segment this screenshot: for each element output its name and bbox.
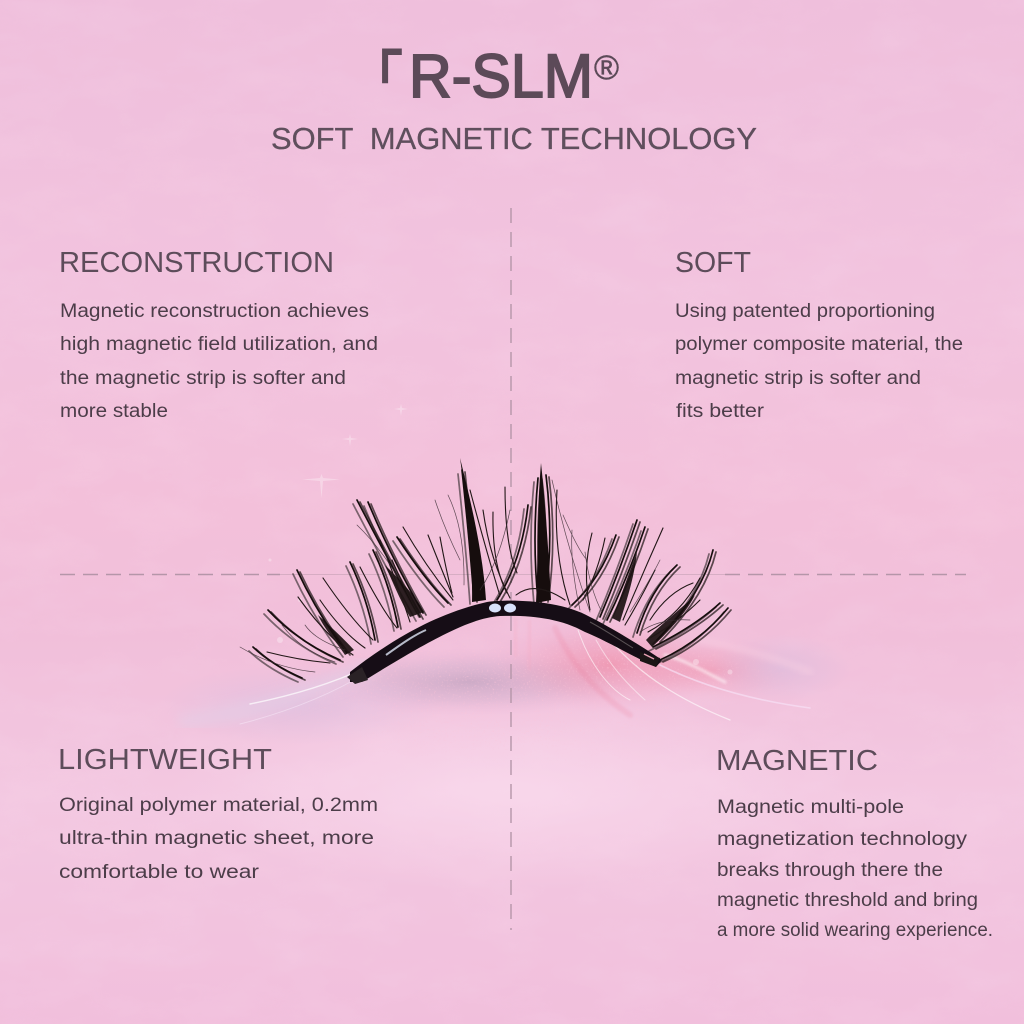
heading: magnetic: MAGNETIC: [716, 745, 878, 777]
text: reconstruction: the magnetic strip is softer and: [60, 368, 346, 389]
logo name: Γ: [380, 40, 402, 94]
panel: lightweight: [58, 744, 378, 883]
text: soft: magnetic strip is softer and: [675, 368, 921, 389]
text: reconstruction: high magnetic field utilization, and: [60, 334, 378, 355]
panel: magnetic: [716, 745, 993, 941]
logo name: ®: [594, 49, 619, 87]
text: lightweight: Original polymer material, 0.2mm: [59, 795, 378, 816]
text: lightweight: ultra-thin magnetic sheet, more: [59, 828, 374, 849]
text: magnetic: magnetization technology: [717, 829, 968, 850]
background: [0, 631, 1024, 883]
text: lightweight: comfortable to wear: [59, 862, 260, 883]
panel: reconstruction: [59, 247, 378, 422]
text: magnetic: Magnetic multi-pole: [717, 797, 904, 818]
eyelash illustration: [240, 458, 731, 684]
fine hairs: [240, 480, 690, 672]
medium hairs: [267, 487, 700, 663]
logo name: R-SLM: [409, 42, 593, 110]
dashed divider lines: [60, 208, 966, 930]
text: reconstruction: Magnetic reconstruction achieves: [60, 301, 369, 322]
text: soft: fits better: [676, 401, 765, 422]
text: reconstruction: [60, 301, 378, 422]
heading: soft: SOFT: [675, 247, 751, 279]
subtitle: SOFT MAGNETIC TECHNOLOGY: [271, 121, 757, 156]
text: magnetic: magnetic threshold and bring: [717, 890, 978, 911]
text: soft: polymer composite material, the: [675, 334, 963, 355]
text: magnetic: [717, 797, 993, 941]
text: soft: [675, 301, 963, 422]
light streaks and sparkles: [185, 404, 810, 724]
lash center spikes: [318, 458, 695, 655]
text: reconstruction: more stable: [60, 401, 168, 422]
text: lightweight: [59, 795, 378, 883]
text: magnetic: a more solid wearing experience.: [717, 920, 993, 941]
text: soft: Using patented proportioning: [675, 301, 935, 322]
thick hairs: [249, 470, 731, 682]
heading: reconstruction: RECONSTRUCTION: [59, 247, 334, 279]
heading: lightweight: LIGHTWEIGHT: [58, 744, 272, 776]
text: magnetic: breaks through there the: [717, 860, 943, 881]
title: [380, 40, 619, 110]
magnetic band: [347, 601, 662, 684]
panel: soft: [675, 247, 963, 422]
